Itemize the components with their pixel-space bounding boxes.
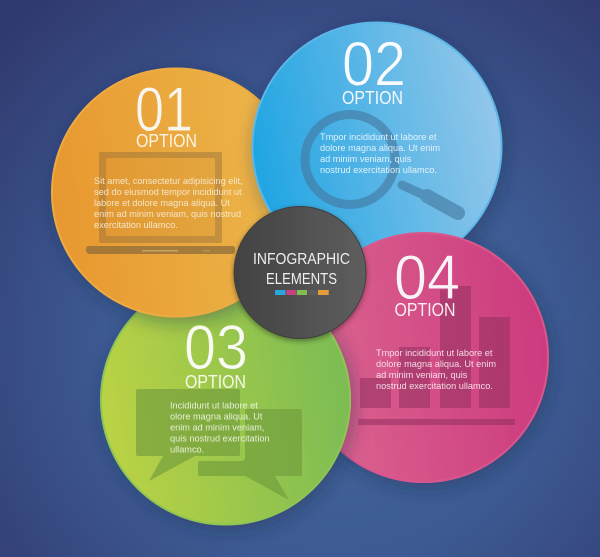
text block: option 03: OPTION [185,372,246,392]
text block: option 02: ad minim veniam, quis [320,154,412,164]
icon: magnifying glass [305,114,458,213]
text block: option 01: enim ad minim veniam, quis nostrud [94,209,241,219]
heading: infographic elements [253,251,350,288]
text block: option 02: Tmpor incididunt ut labore et [320,132,437,142]
panel: pink circle overlap over blue [362,232,535,300]
text block: option 03: quis nostrud exercitation [170,434,270,444]
text block: option 04: ad minim veniam, quis [376,370,468,380]
text block: option 02: OPTION [342,88,403,108]
text block: option 01: Sit amet, consectetur adipisicing elit, [94,176,243,186]
panel: option 03 green circle [101,276,350,524]
panel: option 01 orange circle [52,68,300,316]
text block: option 02: 02 [342,30,406,100]
text block: option 01: 01 [135,75,193,145]
text block: option 04: nostrud exercitation ullamco. [376,381,493,391]
text block: option 03 [170,313,270,454]
heading: infographic elements: INFOGRAPHIC [253,251,350,268]
icon: laptop [86,152,235,254]
text block: option 03: olore magna aliqua. Ut [170,412,263,422]
text block: option 01: exercitation ullamco. [94,220,178,230]
text block: option 02 [320,30,440,175]
text block: option 01: OPTION [136,131,197,151]
text block: option 03: ullamco. [170,444,204,454]
panel: center dark circle [234,206,366,338]
text block: option 03: Incididunt ut labore et [170,400,258,410]
text block: option 04: dolore magna aliqua. Ut enim [376,359,496,369]
panel: option 02 blue circle [252,22,502,272]
text block: option 01 [94,75,243,230]
icon: speech bubbles [136,389,302,500]
heading: infographic elements: ELEMENTS [266,271,337,288]
panel: option 04 pink circle [299,233,548,482]
text block: option 02: dolore magna aliqua. Ut enim [320,143,440,153]
text block: option 03: enim ad minim veniam, [170,422,264,432]
text block: option 04: 04 [394,243,460,313]
text block: option 01: labore et dolore magna aliqua. Ut [94,198,230,208]
legend color strip [275,290,329,295]
text block: option 01: sed do eiusmod tempor incididunt ut [94,187,242,197]
text block: option 04: OPTION [394,300,456,320]
icon: bar chart [358,286,515,425]
text block: option 04 [376,243,496,391]
text block: option 04: Tmpor incididunt ut labore et [376,348,493,358]
text block: option 02: nostrud exercitation ullamco. [320,165,437,175]
text block: option 03: 03 [184,313,248,383]
